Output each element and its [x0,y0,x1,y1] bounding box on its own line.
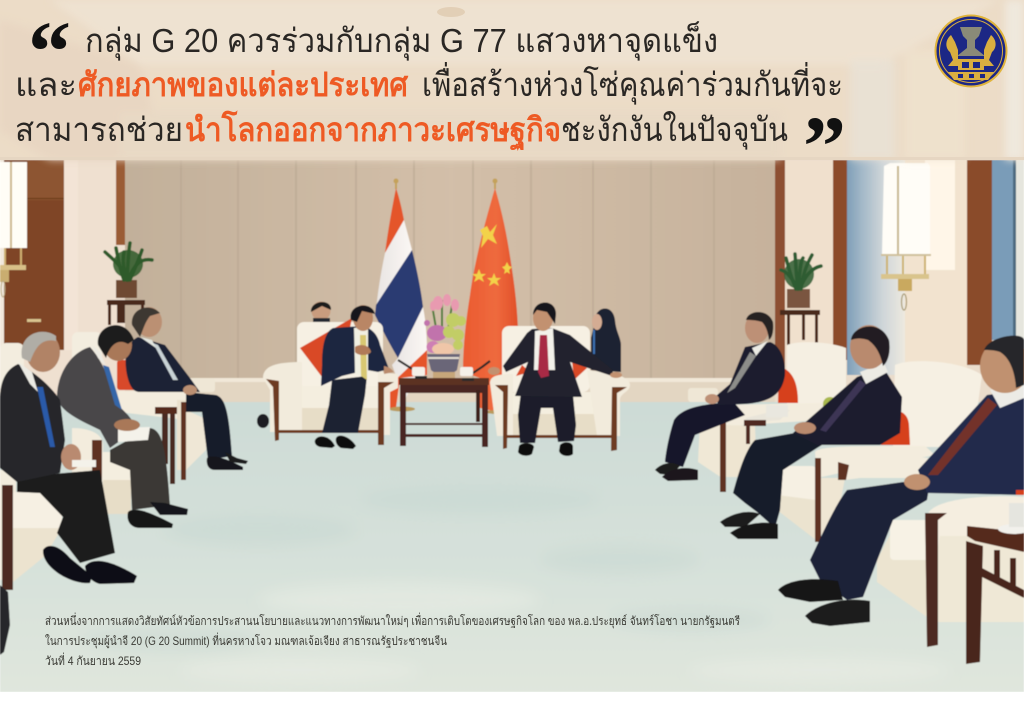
room background [0,0,1024,410]
left row: near armchair [0,470,62,590]
header band [0,0,1024,160]
left row: side table [155,407,177,484]
closing quote mark: ” [803,98,846,194]
curtain: right [992,160,1016,340]
flag: Thailand [375,178,427,412]
curtain: centre [847,160,907,375]
left row: middle armchair [0,343,132,530]
headline line 3 start: สามารถช่วย [15,111,183,148]
highlighted phrase 1: ศักยภาพของแต่ละประเทศ [78,66,409,103]
caption line 1: ส่วนหนึ่งจากการแสดงวิสัยทัศน์หัวข้อการประสานนโยบายและแนวทางการพัฒนาใหม่ๆ เพื่อการเติบโตของเศรษฐกิจโลก ของ พล.อ.ประยุทธ์ จันทร์โอชา นายกรัฐมนตรี [45,612,740,629]
highlighted phrase 2: นำโลกออกจากภาวะเศรษฐกิจ [185,110,561,151]
right row: far armchair [688,342,846,492]
bag on floor [257,414,269,428]
dark object bottom left [0,585,10,655]
man: right row near [778,336,1024,626]
emblem: government seal [934,14,1008,88]
caption line 3: วันที่ 4 กันยายน 2559 [45,652,141,668]
man: left row middle [57,325,188,528]
headline line 1: กลุ่ม G 20 ควรร่วมกับกลุ่ม G 77 แสวงหาจุดแข็ง [85,21,718,61]
man: right row middle [720,325,902,539]
headline line 2 end: เพื่อสร้างห่วงโซ่คุณค่าร่วมกันที่จะ [422,62,843,105]
microphones and tea cups [398,360,490,381]
right row: near armchair [836,456,1024,647]
flower arrangement [424,294,466,378]
plant: left [105,243,152,325]
tea table [399,378,489,447]
door [4,160,64,350]
flag: China [463,178,518,414]
right row: tea table [744,397,837,444]
plant: right [780,254,821,345]
man: left row near [0,332,137,584]
right row: middle armchair [777,361,982,542]
man: right row far [655,312,785,481]
lamp: right [881,163,931,310]
floor [0,402,1024,692]
man: Chinese president [488,302,622,456]
quote headline [15,3,846,194]
armchair: left main [263,318,398,445]
headline line 3 end: ชะงักงันในปัจจุบัน [561,111,788,150]
man: left row far [126,307,248,470]
caption line 2: ในการประชุมผู้นำจี 20 (G 20 Summit) ที่นครหางโจว มณฑลเจ้อเจียง สาธารณรัฐประชาชนจีน [45,632,447,649]
background aides [311,302,621,372]
headline line 2 start: และ [15,66,77,103]
armchair: right main [490,326,630,451]
right side table [966,503,1024,664]
left row: far armchair [72,332,215,480]
lamp: left [0,162,27,297]
caption [45,612,740,668]
white footer strip [0,692,1024,705]
man: Thai prime minister [315,305,394,449]
opening quote mark: “ [28,3,71,99]
